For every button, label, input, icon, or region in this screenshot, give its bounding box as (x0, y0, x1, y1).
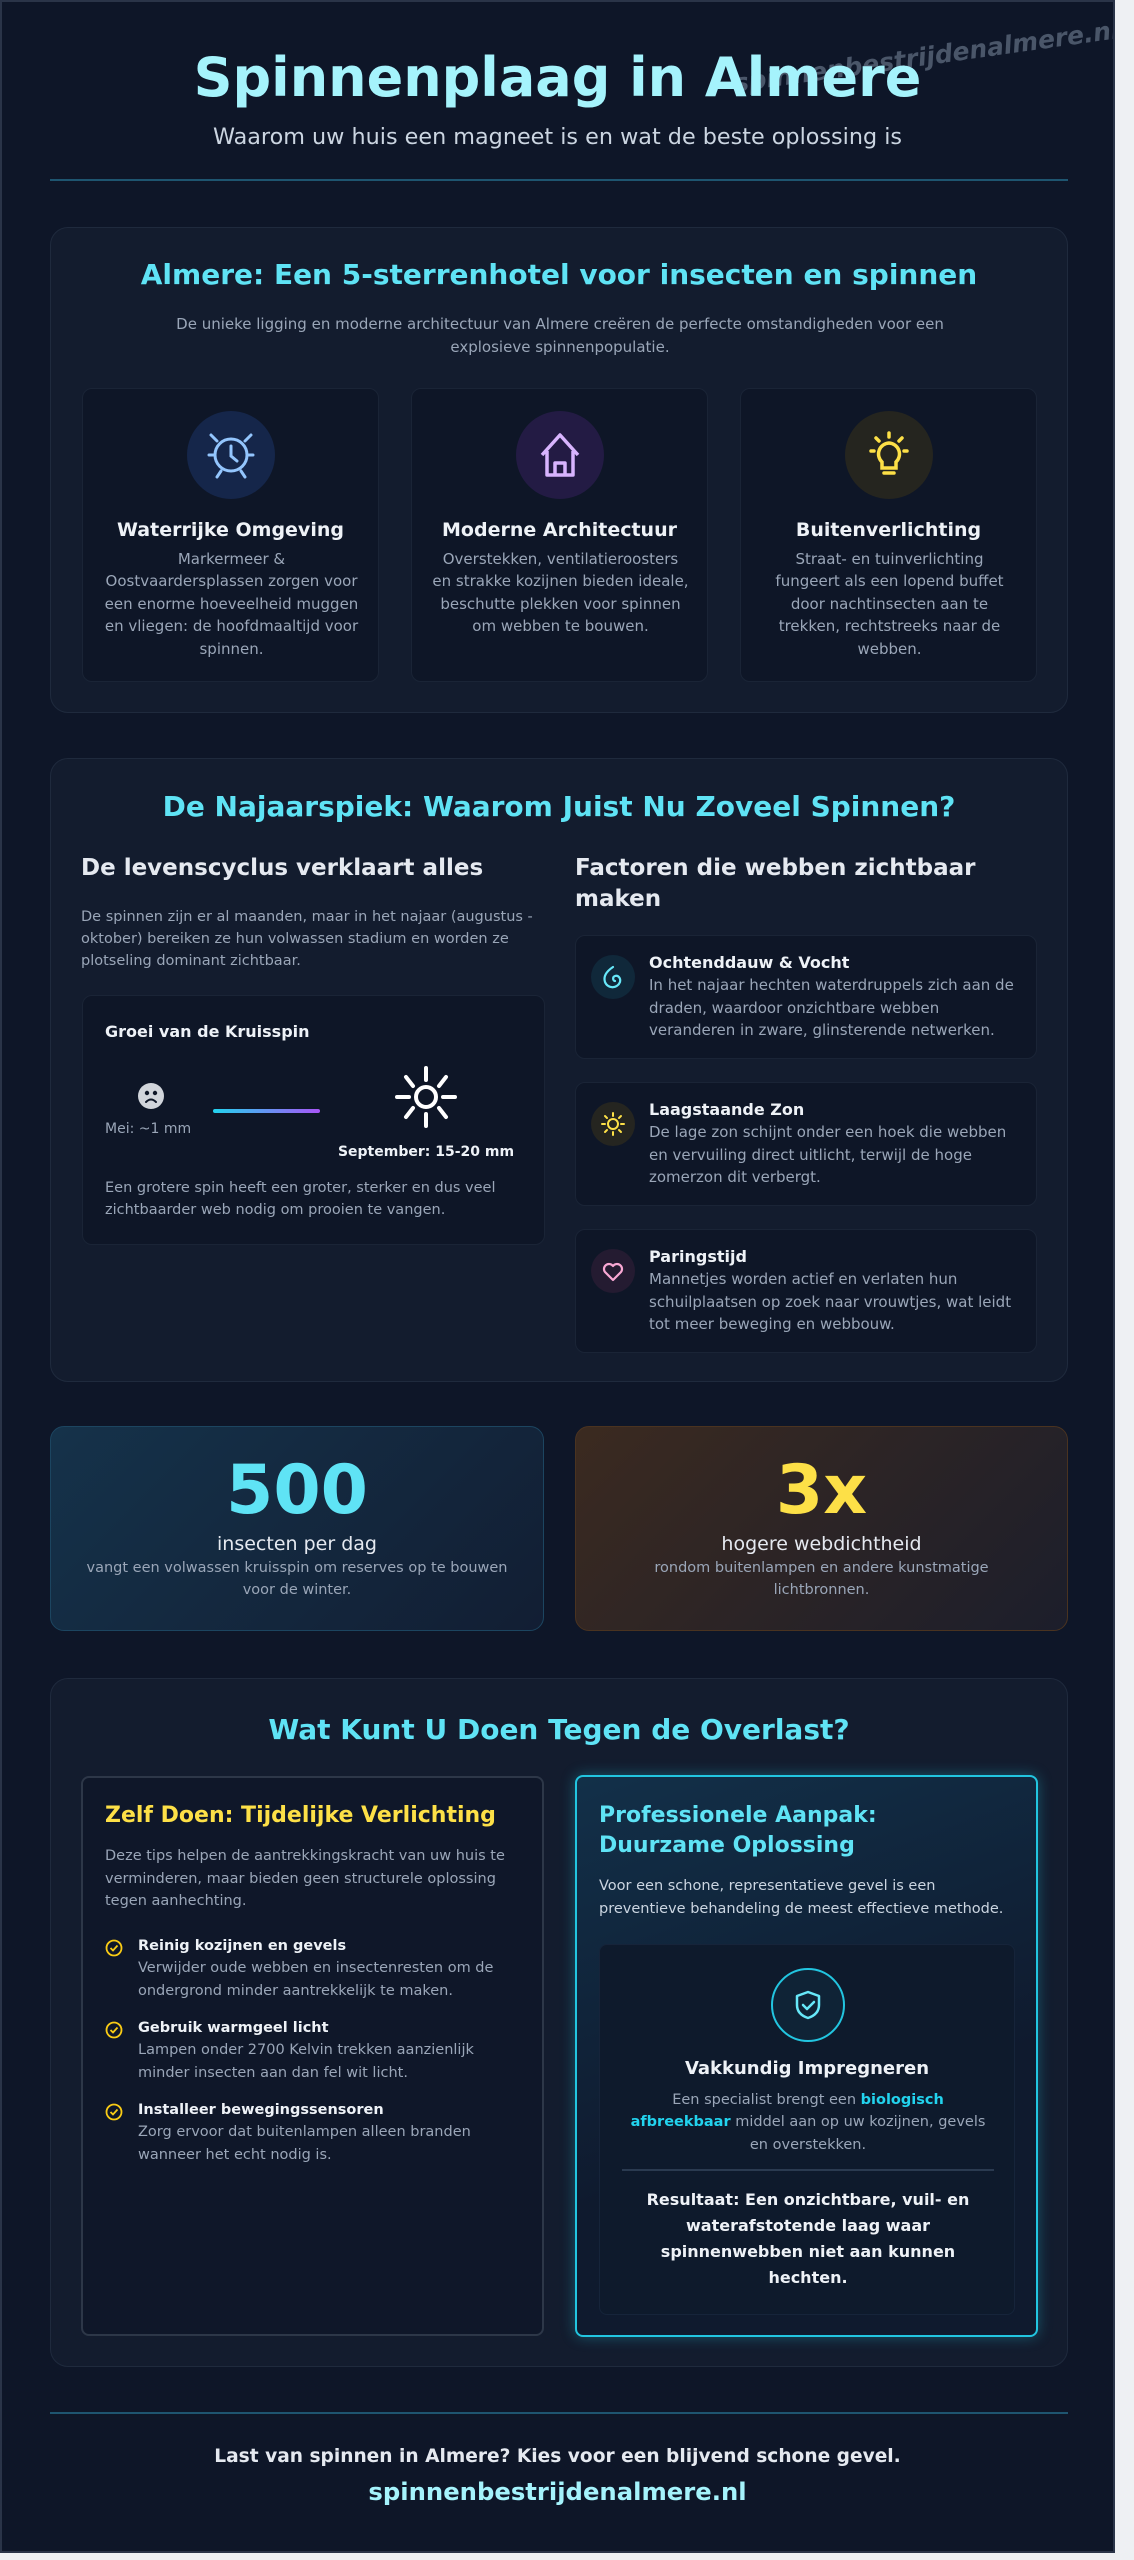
tip 2: Lampen onder 2700 Kelvin trekken aanzienlijk minder insecten aan dan fel wit licht. (138, 2042, 474, 2080)
card text: Markermeer & Oostvaardersplassen zorgen voor een enorme hoeveelheid muggen en vliegen: de hoofdmaaltijd voor spinnen. (105, 550, 358, 658)
card: zelf doen tips (81, 1776, 544, 2336)
card text: Straat- en tuinverlichting fungeert als een lopend buffet door nachtinsecten aan te trekken, rechtstreeks naar de webben. (775, 550, 1004, 658)
subtitle: Waarom uw huis een magneet is en wat de beste oplossing is (213, 124, 902, 150)
label: september: September: 15-20 mm (338, 1144, 514, 1160)
footer text: Last van spinnen in Almere? Kies voor een blijvend schone gevel. (214, 2446, 901, 2467)
icon: sun large (395, 1066, 457, 1128)
card title: Moderne Architectuur (442, 519, 677, 541)
chart: groei van de kruisspin (82, 995, 545, 1245)
panel: Najaarspiek (50, 758, 1068, 1382)
factor text: Mannetjes worden actief en verlaten hun schuilplaatsen op zoek naar vrouwtjes, wat leidt tot meer beweging en webbouw. (649, 1270, 1011, 1333)
card: water (82, 388, 379, 682)
growth line (213, 1109, 320, 1113)
tip 2 (106, 2020, 474, 2080)
icon: bulb (845, 411, 933, 499)
card text: Overstekken, ventilatieroosters en strakke kozijnen bieden ideale, beschutte plekken voor spinnen om webben te bouwen. (432, 550, 689, 635)
icon: drop (591, 955, 635, 999)
factor text: Laagstaande Zon (649, 1100, 804, 1119)
stat: 500 insecten: 500 (226, 1451, 368, 1530)
stat: 500 insecten (50, 1426, 544, 1631)
factor text: In het najaar hechten waterdruppels zich aan de draden, waardoor onzichtbare webben veranderen in zware, glinsterende netwerken. (649, 976, 1014, 1039)
right subheading: Factoren die webben zichtbaar maken (575, 855, 975, 912)
tip 3 (106, 2102, 471, 2162)
chart caption: Een grotere spin heeft een groter, sterker en dus veel zichtbaarder web nodig om prooien te vangen. (105, 1180, 496, 1218)
icon: shield (771, 1968, 845, 2042)
card: architectuur (411, 388, 708, 682)
inner box: impregneren (599, 1944, 1015, 2315)
card intro: Voor een schone, representatieve gevel is een preventieve behandeling de meest effectieve methode. (599, 1878, 1003, 1916)
stat: 3x webdichtheid (575, 1426, 1068, 1631)
heading: De Najaarspiek: Waarom Juist Nu Zoveel Spinnen? (163, 790, 955, 823)
tip 3: Installeer bewegingssensoren (138, 2102, 384, 2118)
watermark: spinnenbestrijdenalmere.nl (732, 15, 1115, 98)
intro text: De unieke ligging en moderne architectuur van Almere creëren de perfecte omstandigheden voor een explosieve spinnenpopulatie. (176, 315, 944, 356)
stat: 3x webdichtheid: 3x (776, 1451, 867, 1530)
stat: 500 insecten: insecten per dag (217, 1533, 377, 1555)
card title: Professionele Aanpak: Duurzame Oplossing (599, 1803, 877, 1858)
footer url: spinnenbestrijdenalmere.nl (368, 2477, 747, 2506)
card: professionele aanpak (575, 1775, 1038, 2337)
factor text: Paringstijd (649, 1247, 747, 1266)
stat: 500 insecten: vangt een volwassen kruisspin om reserves op te bouwen voor de winter. (86, 1560, 507, 1598)
factor card: dauw (575, 935, 1037, 1059)
card title: Zelf Doen: Tijdelijke Verlichting (105, 1803, 496, 1828)
card title: Buitenverlichting (796, 519, 981, 541)
heading: Almere: Een 5-sterrenhotel voor insecten en spinnen (141, 258, 977, 291)
factor text: De lage zon schijnt onder een hoek die webben en vervuiling direct uitlicht, terwijl de hoge zomerzon dit verbergt. (649, 1123, 1006, 1186)
tip 1 (106, 1938, 493, 1998)
card title: Waterrijke Omgeving (117, 519, 344, 541)
factor text: Ochtenddauw & Vocht (649, 953, 849, 972)
box text: Een specialist brengt een biologisch afbreekbaar middel aan op uw kozijnen, gevels en overstekken. (631, 2092, 985, 2153)
tip 1: Reinig kozijnen en gevels (138, 1938, 346, 1954)
card: verlichting (740, 388, 1037, 682)
stat: 3x webdichtheid: rondom buitenlampen en andere kunstmatige lichtbronnen. (654, 1560, 989, 1598)
icon: house (516, 411, 604, 499)
stat: 3x webdichtheid: hogere webdichtheid (721, 1533, 922, 1555)
heading: Wat Kunt U Doen Tegen de Overlast? (268, 1713, 850, 1746)
panel: Almere 5-sterrenhotel (50, 227, 1068, 713)
box title: Vakkundig Impregneren (685, 2058, 929, 2079)
tip 3: Zorg ervoor dat buitenlampen alleen branden wanneer het echt nodig is. (138, 2124, 471, 2162)
label: mei: Mei: ~1 mm (105, 1121, 191, 1137)
tip 1: Verwijder oude webben en insectenresten om de ondergrond minder aantrekkelijk te maken. (138, 1960, 493, 1998)
result text: Resultaat: Een onzichtbare, vuil- en waterafstotende laag waar spinnenwebben niet aan kunnen hechten. (647, 2190, 969, 2287)
icon: water (187, 411, 275, 499)
left subheading: De levenscyclus verklaart alles (81, 855, 483, 881)
title: Spinnenplaag in Almere (194, 46, 921, 109)
icon: small spider face (138, 1083, 164, 1109)
icon: heart (591, 1249, 635, 1293)
factor card: zon (575, 1082, 1037, 1206)
icon: sun small (591, 1102, 635, 1146)
tip 2: Gebruik warmgeel licht (138, 2020, 329, 2036)
card intro: Deze tips helpen de aantrekkingskracht van uw huis te verminderen, maar bieden geen structurele oplossing tegen aanhechting. (105, 1848, 505, 1909)
panel: Wat kunt u doen (50, 1678, 1068, 2367)
chart title: Groei van de Kruisspin (105, 1022, 310, 1041)
factor card: paring (575, 1229, 1037, 1353)
left text: De spinnen zijn er al maanden, maar in het najaar (augustus - oktober) bereiken ze hun volwassen stadium en worden ze plotseling dominant zichtbaar. (81, 909, 533, 969)
